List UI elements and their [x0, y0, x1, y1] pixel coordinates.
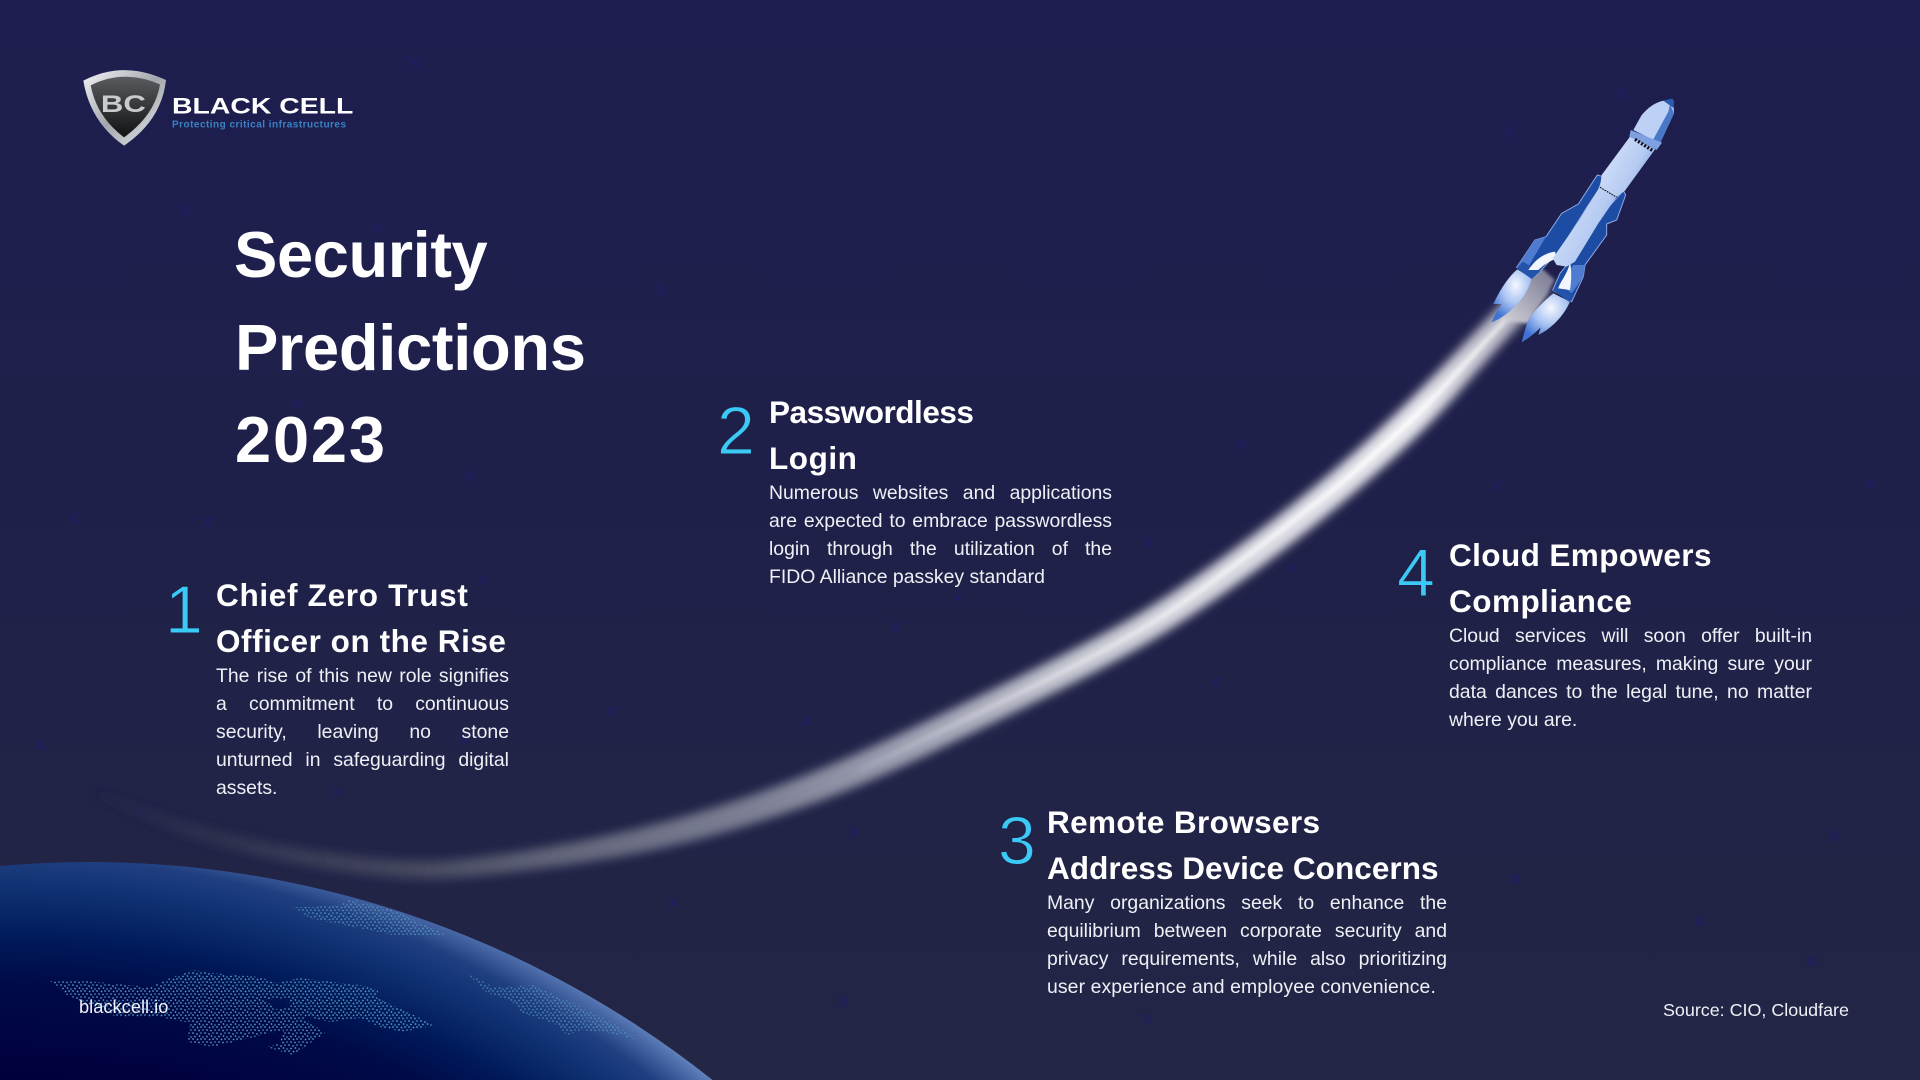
continent: right landmass	[467, 973, 637, 1040]
body text 3: user experience and employee convenience.	[1047, 976, 1436, 998]
title: 2023	[235, 403, 387, 476]
body text 1: a commitment to continuous	[216, 693, 509, 715]
body text 2: login through the utilization of the	[769, 538, 1112, 560]
rocket	[1492, 98, 1674, 342]
body text 2: are expected to embrace passwordless	[769, 510, 1112, 532]
number 2: 2	[717, 393, 755, 469]
prediction 4: Compliance	[1449, 583, 1632, 619]
website url: blackcell.io	[79, 996, 168, 1017]
continent: upper landmass	[293, 898, 447, 935]
body text 4	[1449, 625, 1812, 731]
heading 4: Cloud Empowers	[1449, 537, 1712, 573]
body text 2	[769, 482, 1112, 588]
prediction 1: Officer on the Rise	[216, 623, 507, 659]
prediction 2	[717, 393, 1112, 588]
heading 3: Remote Browsers	[1047, 804, 1320, 840]
title: Predictions	[235, 311, 586, 384]
body text 3	[1047, 892, 1447, 998]
body text 1: unturned in safeguarding digital	[216, 749, 509, 771]
prediction 2: Login	[769, 440, 857, 476]
planet earth	[0, 862, 712, 1080]
logo: Black Cell: Protecting critical infrastructures	[172, 119, 346, 130]
logo: Black Cell: BC	[101, 91, 146, 118]
heading 2: Passwordless	[769, 394, 973, 430]
body text 3: privacy requirements, while also prioritizing	[1047, 948, 1447, 970]
body text 1: The rise of this new role signifies	[216, 665, 509, 687]
body text 3: Many organizations seek to enhance the	[1047, 892, 1447, 914]
body text 4: data dances to the legal tune, no matter	[1449, 681, 1812, 703]
body text 2: FIDO Alliance passkey standard	[769, 566, 1045, 588]
body text 1	[216, 665, 509, 799]
heading 1: Chief Zero Trust	[216, 577, 469, 613]
number 1: 1	[165, 572, 203, 648]
body text 4: Cloud services will soon offer built-in	[1449, 625, 1812, 647]
title	[234, 218, 586, 476]
prediction 3	[998, 803, 1447, 998]
continent: large landmass	[50, 970, 435, 1055]
prediction 4	[1397, 535, 1812, 731]
body text 1: security, leaving no stone	[216, 721, 509, 743]
logo: Black Cell: BLACK CELL	[172, 94, 353, 119]
prediction 1	[165, 572, 509, 799]
body text 3: equilibrium between corporate security and	[1047, 920, 1447, 942]
prediction 3: Address Device Concerns	[1047, 850, 1439, 886]
body text 1: assets.	[216, 777, 277, 799]
body text 4: compliance measures, making sure your	[1449, 653, 1812, 675]
source note: Source: CIO, Cloudfare	[1663, 1000, 1849, 1020]
number 3: 3	[998, 803, 1036, 879]
body text 4: where you are.	[1449, 709, 1577, 731]
number 4: 4	[1397, 535, 1435, 611]
body text 2: Numerous websites and applications	[769, 482, 1112, 504]
logo: Black Cell	[83, 70, 353, 146]
title: Security	[234, 218, 487, 291]
